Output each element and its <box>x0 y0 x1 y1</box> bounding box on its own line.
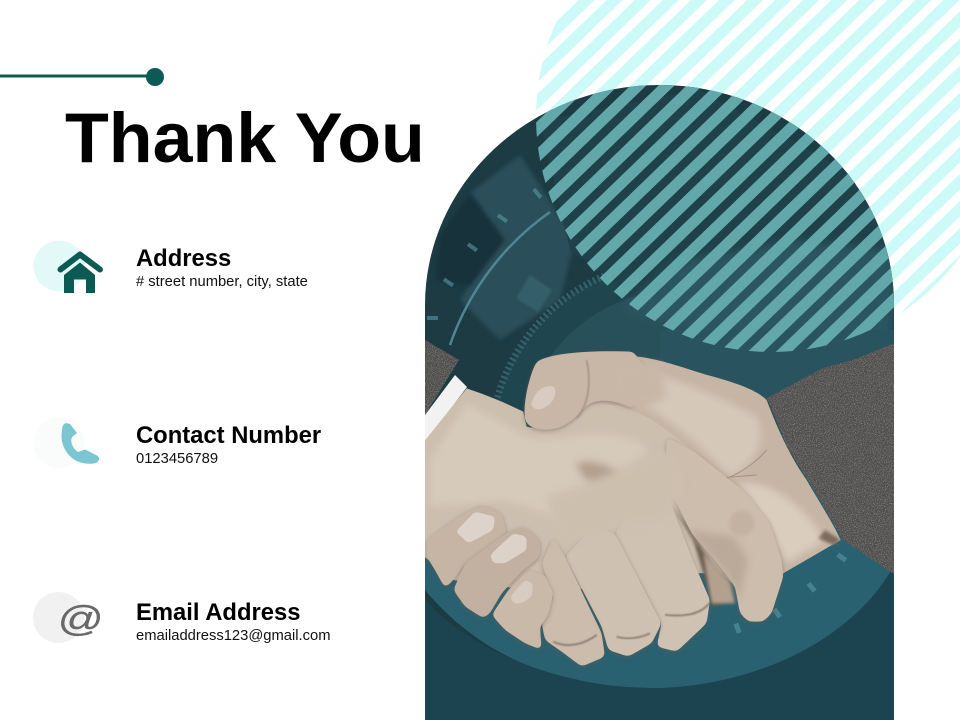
contact heading: Contact Number <box>136 422 321 449</box>
email icon: @ <box>57 598 105 639</box>
clasped hands, drawn in 3x coordinates <box>420 351 841 667</box>
title: Thank You <box>65 98 425 177</box>
thumb <box>524 351 667 430</box>
background light marks <box>427 188 847 634</box>
gripping finger three <box>492 570 553 650</box>
left sleeve and cuff <box>425 340 467 443</box>
phone icon <box>61 423 99 464</box>
address heading: Address <box>136 245 231 272</box>
second finger <box>565 527 662 657</box>
striped overlay inside arch <box>530 80 900 360</box>
email text: emailaddress123@gmail.com <box>136 628 331 644</box>
decorative striped circle <box>536 0 960 314</box>
email heading: Email Address <box>136 599 300 626</box>
address text: # street number, city, state <box>136 274 308 290</box>
right sleeve <box>767 343 895 575</box>
gripping finger two <box>453 527 540 618</box>
third finger <box>615 497 710 652</box>
first finger <box>542 537 605 667</box>
right hand back <box>588 356 840 584</box>
gripping finger one <box>427 505 507 588</box>
shadow between fingers <box>675 510 727 608</box>
handshake photo in arch <box>420 80 900 720</box>
accent line with dot <box>0 68 164 86</box>
address icon <box>34 240 103 293</box>
index finger <box>665 437 783 622</box>
email icon <box>33 592 105 643</box>
left hand palm <box>420 388 783 593</box>
photo background: technology dial <box>425 80 900 720</box>
blended knuckle area over finger roots <box>550 451 677 539</box>
contact text: 0123456789 <box>136 450 218 466</box>
